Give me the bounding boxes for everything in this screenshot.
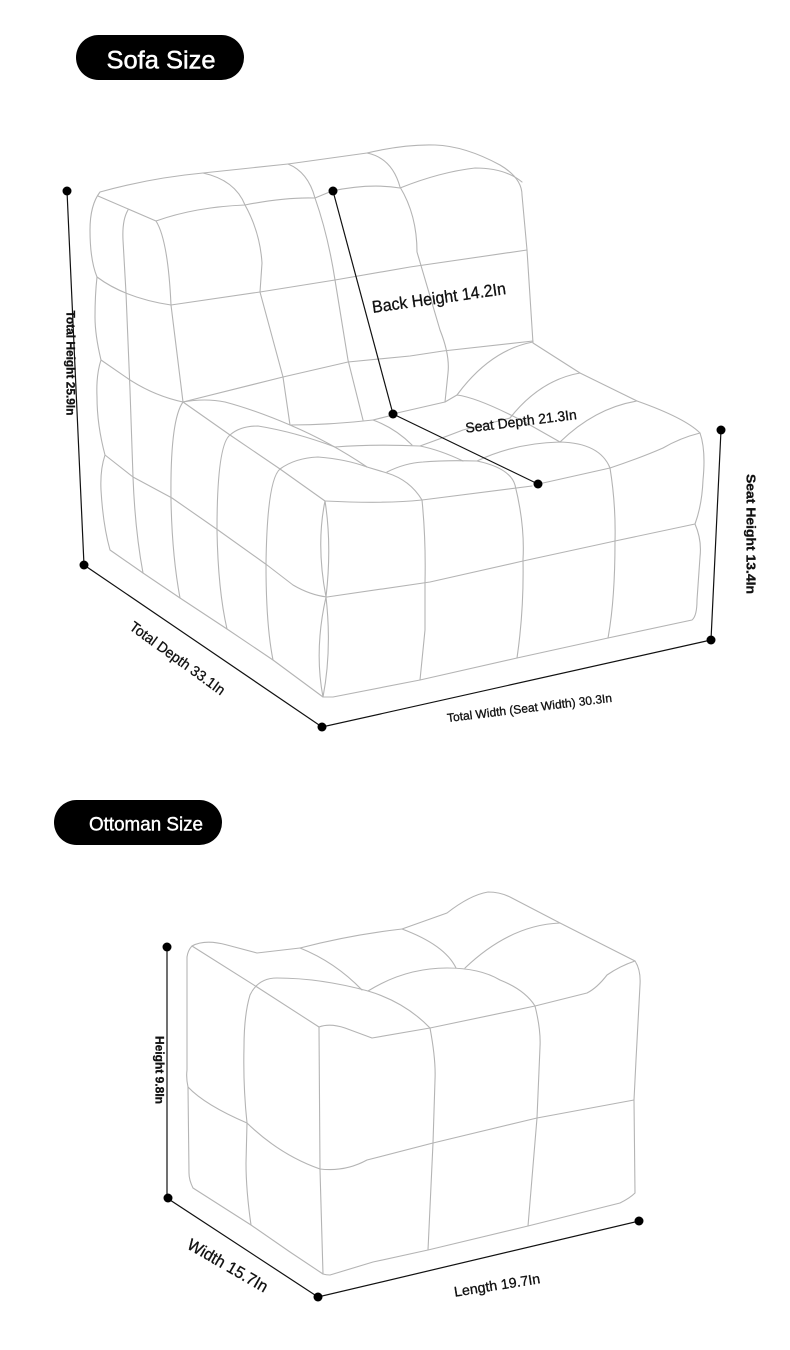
sofa dimension dots	[62, 186, 726, 732]
label: ottoman length: Length 19.7In	[453, 1270, 541, 1300]
label: total depth: Total Depth 33.1In	[126, 619, 228, 699]
ottoman dimension dots	[162, 942, 644, 1302]
heading: Sofa Size	[76, 35, 244, 80]
label: seat depth: Seat Depth 21.3In	[464, 406, 578, 436]
heading: Ottoman Size	[54, 800, 222, 845]
ottoman line drawing	[187, 892, 640, 1275]
label: ottoman height: Height 9.8In	[152, 1036, 164, 1104]
label: ottoman width: Width 15.7In	[184, 1236, 271, 1296]
ottoman dimension lines	[167, 947, 639, 1297]
sofa line drawing	[90, 145, 704, 697]
label: back height: Back Height 14.2In	[371, 279, 507, 317]
sofa dimension lines	[67, 191, 721, 727]
label: seat height: Seat Height 13.4In	[744, 474, 758, 594]
heading: Ottoman Size: Ottoman Size	[89, 814, 203, 836]
label: total height: Total Height 25.9In	[64, 310, 78, 416]
label: total width: Total Width (Seat Width) 30.3In	[446, 691, 613, 725]
heading: Sofa Size: Sofa Size	[106, 46, 216, 74]
